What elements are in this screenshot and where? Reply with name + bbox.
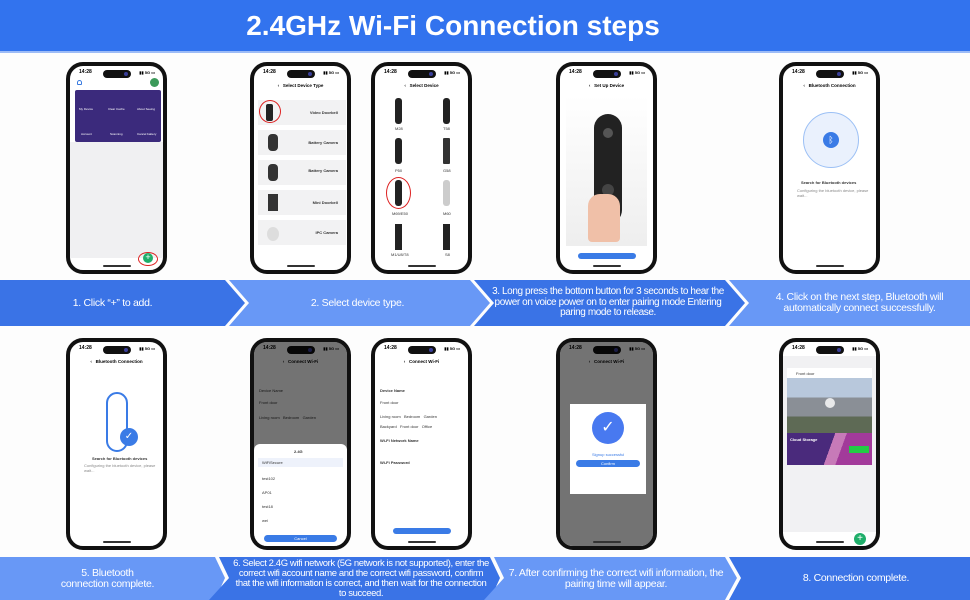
phone: step 2 select device type: 14:28 [263,69,276,75]
phone: step 7 signup successful: ▮▮ 5G ▭ [629,346,645,351]
menu panel: Scanning [110,132,123,136]
phone: step 6 wifi list [250,338,351,550]
phone: step 8 connection complete: 14:28 [792,345,805,351]
phone: step 6 wifi list: ‹ Connect Wi-Fi [283,359,318,364]
phone: step 2 select device type: Battery Camera [308,168,338,173]
phone: step 2 select device type: ▮▮ 5G ▭ [323,70,339,75]
phone: step 8 connection complete: Front door [796,371,814,376]
phone: step 2 select device type: IPC Camera [316,230,338,235]
menu panel: About Seeing [137,107,155,111]
title: 2.4GHz Wi-Fi Connection steps [246,10,660,41]
phone: step 2 select device: T58 [443,126,450,131]
doorbell illustration [594,114,622,224]
phone: step 6 wifi list: Device Name [259,388,283,393]
phone: step 7 signup successful [556,338,657,550]
phone: step 6 wifi form: Wi-Fi Network Name [380,438,419,443]
phone: step 5 bluetooth connected: ✓ [125,431,133,442]
phone: step 3 setup device: ▮▮ 5G ▭ [629,70,645,75]
wifi sheet: test102 [262,476,275,481]
menu panel [75,90,161,142]
phone: step 5 bluetooth connected: 14:28 [79,345,92,351]
phone: step 6 wifi list: Front door [259,400,277,405]
phone: step 7 signup successful: ✓ [601,419,615,436]
phone: step 6 wifi list: 14:28 [263,345,276,351]
step 2 text: 2. Select device type. [311,296,404,308]
phone: step 6 wifi form: Backyard Front door Office [380,424,432,429]
phone: step 2 select device: M60 [443,211,451,216]
phone: step 4 bluetooth searching: ▮▮ 5G ▭ [852,70,868,75]
phone: step 4 bluetooth searching: ‹ Bluetooth Connection [803,83,856,88]
step 5 text [61,566,154,590]
phone: step 2 select device type: Mini Doorbell [313,200,338,205]
phone: step 2 select device type [250,62,351,274]
wifi sheet [254,444,347,548]
wifi sheet: 2.4G [294,449,303,454]
phone: step 4 bluetooth searching: 14:28 [792,69,805,75]
phone: step 3 setup device [556,62,657,274]
title bar [0,0,970,53]
menu panel: Cancel battery [137,132,156,136]
step banner row 2 [0,557,970,600]
phone: step 5 bluetooth connected: Search for Bluetooth devices [92,456,147,461]
phone: step 2 select device: 14:28 [384,69,397,75]
phone: step 6 wifi form: Living room Bedroom Garden [380,414,437,419]
step 7 text: 7. After confirming the correct wifi information, the pairing time will appear. [509,566,723,590]
phone: step 7 signup successful: ‹ Connect Wi-Fi [589,359,624,364]
phone: step 7 signup successful: Signup successful [592,452,624,457]
phone: step 6 wifi list: Living room Bedroom Garden [259,415,316,420]
step 4 text: 4. Click on the next step, Bluetooth will automatically connect successfully. [776,291,943,314]
phone: step 6 wifi form: ▮▮ 5G ▭ [444,346,460,351]
phone: step 8 connection complete: + [857,533,863,544]
phone: step 4 bluetooth searching: Search for Bluetooth devices [801,180,856,185]
phone: step 8 connection complete: ▮▮ 5G ▭ [852,346,868,351]
add button [138,252,158,266]
wifi sheet: AP01 [262,490,272,495]
phone: step 5 bluetooth connected: ‹ Bluetooth Connection [90,359,143,364]
wifi sheet: WiFiSecure [262,460,283,465]
step 6 text: 6. Select 2.4G wifi network (5G network is not supported), enter the correct wifi account name and the correct wifi password, confirm that the wifi information is correct, and then wait for the connection to succeed. [233,558,489,598]
phone: step 3 setup device: ‹ Set Up Device [589,83,624,88]
phone: step 6 wifi form: ‹ Connect Wi-Fi [404,359,439,364]
phone: step 1 home screen [66,62,167,274]
phone: step 2 select device: ‹ Select Device [404,83,439,88]
phone: step 2 select device: M69/E50 [392,211,408,216]
phone: step 1 home screen: ▮▮ 5G ▭ [139,70,155,75]
wifi sheet: Cancel [294,536,307,541]
phone: step 1 home screen: 14:28 [79,69,92,75]
phone: step 2 select device: ▮▮ 5G ▭ [444,70,460,75]
phone: step 2 select device: P50 [395,168,402,173]
phone: step 6 wifi form [371,338,472,550]
menu panel: Clear Cache [108,107,125,111]
phone: step 3 setup device: 14:28 [569,69,582,75]
step 8 text: 8. Connection complete. [803,572,909,584]
phone: step 5 bluetooth connected [66,338,167,550]
phone: step 6 wifi form: Device Name [380,388,405,393]
phone: step 2 select device type: Battery Camera [308,140,338,145]
menu panel: My Device [79,107,93,111]
wifi sheet: wei [262,518,268,523]
step 5 text: connection complete. [61,578,154,590]
menu panel: Account [81,132,92,136]
phone: step 2 select device: M1/U8/T8 [391,252,409,257]
step 5 text: 5. Bluetooth [81,566,134,578]
step banner row 1 [0,280,970,326]
step 1 text: 1. Click “+” to add. [73,296,152,308]
phone: step 4 bluetooth searching: ᛒ [828,135,834,145]
phone: step 2 select device: M28 [395,126,403,131]
phone: step 2 select device type: ‹ Select Device Type [278,83,323,88]
phone: step 4 bluetooth searching [779,62,880,274]
phone: step 6 wifi form: 14:28 [384,345,397,351]
wifi sheet: test18 [262,504,273,509]
phone: step 5 bluetooth connected: Configuring the bluetooth device, please wait... [84,463,155,473]
phone: step 5 bluetooth connected: ▮▮ 5G ▭ [139,346,155,351]
house image [787,378,872,433]
cloud storage [787,433,872,465]
phone: step 4 bluetooth searching: Configuring the bluetooth device, please wait... [797,188,868,198]
phone: step 7 signup successful: Confirm [601,461,615,466]
phone: step 1 home screen: + [145,252,151,262]
phone: step 6 wifi form: Front door [380,400,398,405]
phone: step 2 select device: G58 [443,168,451,173]
phone: step 6 wifi form: Wi-Fi Password [380,460,410,465]
phone: step 8 connection complete [779,338,880,550]
step 3 text: 3. Long press the bottom button for 3 seconds to hear the power on voice power on to enter pairing mode Entering paring mode to release. [492,286,724,318]
phone: step 6 wifi list: ▮▮ 5G ▭ [323,346,339,351]
cloud storage: Cloud Storage [790,437,817,442]
phone: step 7 signup successful: 14:28 [569,345,582,351]
phone: step 2 select device: S8 [445,252,450,257]
phone: step 2 select device type: Video Doorbell [310,110,338,115]
phone: step 2 select device [371,62,472,274]
